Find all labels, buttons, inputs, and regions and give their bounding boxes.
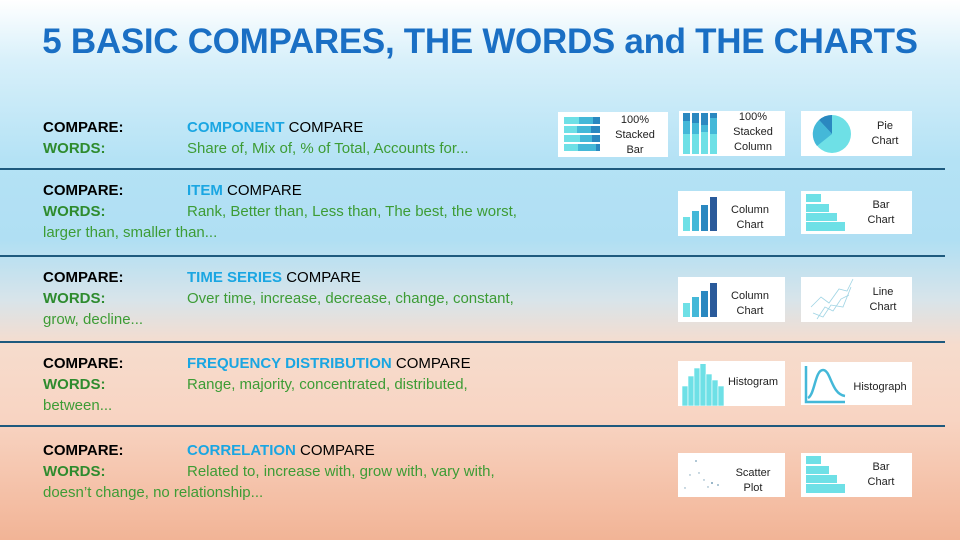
chart card: bar chart row5: Bar <box>872 461 890 473</box>
row 2 text: item: COMPARE: <box>43 182 124 199</box>
chart card: pie chart: Chart <box>872 135 898 147</box>
chart card: column chart row3: Column <box>731 290 769 302</box>
row 5 text: correlation: WORDS: <box>43 463 106 480</box>
row 4 text: frequency: FREQUENCY DISTRIBUTION COMPARE <box>187 355 471 372</box>
chart card: line chart <box>801 277 912 322</box>
chart card: scatter plot: Scatter <box>736 467 770 479</box>
chart card: histogram <box>678 361 785 406</box>
row 5 text: correlation: COMPARE: <box>43 442 124 459</box>
row 2 text: item: ITEM COMPARE <box>187 182 302 199</box>
chart card: 100% stacked bar: Bar <box>626 144 644 156</box>
chart card: column chart row2 <box>678 191 785 236</box>
chart card: 100% stacked column <box>679 111 785 156</box>
chart card: 100% stacked column: Column <box>734 141 772 153</box>
chart card: bar chart row2 <box>801 191 912 234</box>
chart card: 100% stacked column: 100% <box>739 111 767 123</box>
chart card: bar chart row5: Chart <box>868 476 894 488</box>
chart card: column chart row3 <box>678 277 785 322</box>
row 2 text: item: larger than, smaller than... <box>43 224 217 241</box>
chart card: column chart row2: Chart <box>737 219 763 231</box>
row 1 text: component: Share of, Mix of, % of Total, Accounts for... <box>187 140 469 157</box>
row 5 text: correlation: doesn’t change, no relationship... <box>43 484 263 501</box>
row 3 text: time series <box>43 269 514 328</box>
row 2 text: item <box>43 182 517 241</box>
chart card: pie chart: Pie <box>877 120 893 132</box>
row 5 text: correlation: CORRELATION COMPARE <box>187 442 375 459</box>
row 1 text: component: COMPONENT COMPARE <box>187 119 363 136</box>
chart card: scatter plot: Plot <box>744 482 762 494</box>
row 4 text: frequency: WORDS: <box>43 376 106 393</box>
chart card: line chart: Chart <box>870 301 896 313</box>
row 3 text: time series: COMPARE: <box>43 269 124 286</box>
row 4 text: frequency: between... <box>43 397 112 414</box>
chart card: bar chart row2: Bar <box>872 199 890 211</box>
row 2 text: item: Rank, Better than, Less than, The best, the worst, <box>187 203 517 220</box>
row 3 text: time series: TIME SERIES COMPARE <box>187 269 361 286</box>
row 1 text: component: COMPARE: <box>43 119 124 136</box>
row 1 text: component <box>43 119 469 157</box>
chart card: histogram: Histogram <box>728 376 778 388</box>
title: 5 BASIC COMPARES, THE WORDS and THE CHARTS <box>42 22 918 61</box>
chart card: 100% stacked bar <box>558 112 668 157</box>
row 4 text: frequency: COMPARE: <box>43 355 124 372</box>
row 3 text: time series: WORDS: <box>43 290 106 307</box>
chart card: 100% stacked bar: Stacked <box>615 129 655 141</box>
chart card: histograph: Histograph <box>853 381 907 393</box>
chart card: scatter plot <box>678 453 785 497</box>
row 2 text: item: WORDS: <box>43 203 106 220</box>
chart card: 100% stacked column: Stacked <box>733 126 773 138</box>
row 5 text: correlation: Related to, increase with, grow with, vary with, <box>187 463 495 480</box>
chart card: column chart row3: Chart <box>737 305 763 317</box>
row 4 text: frequency: Range, majority, concentrated, distributed, <box>187 376 468 393</box>
row 3 text: time series: grow, decline... <box>43 311 143 328</box>
row 4 text: frequency <box>43 355 471 414</box>
row 1 text: component: WORDS: <box>43 140 106 157</box>
chart card: 100% stacked bar: 100% <box>621 114 649 126</box>
row 3 text: time series: Over time, increase, decrease, change, constant, <box>187 290 514 307</box>
chart card: bar chart row5 <box>801 453 912 497</box>
chart card: line chart: Line <box>873 286 893 298</box>
chart card: histograph <box>801 362 912 405</box>
row 5 text: correlation <box>43 442 495 501</box>
chart card: bar chart row2: Chart <box>868 214 894 226</box>
chart card: pie chart <box>801 111 912 156</box>
chart card: column chart row2: Column <box>731 204 769 216</box>
